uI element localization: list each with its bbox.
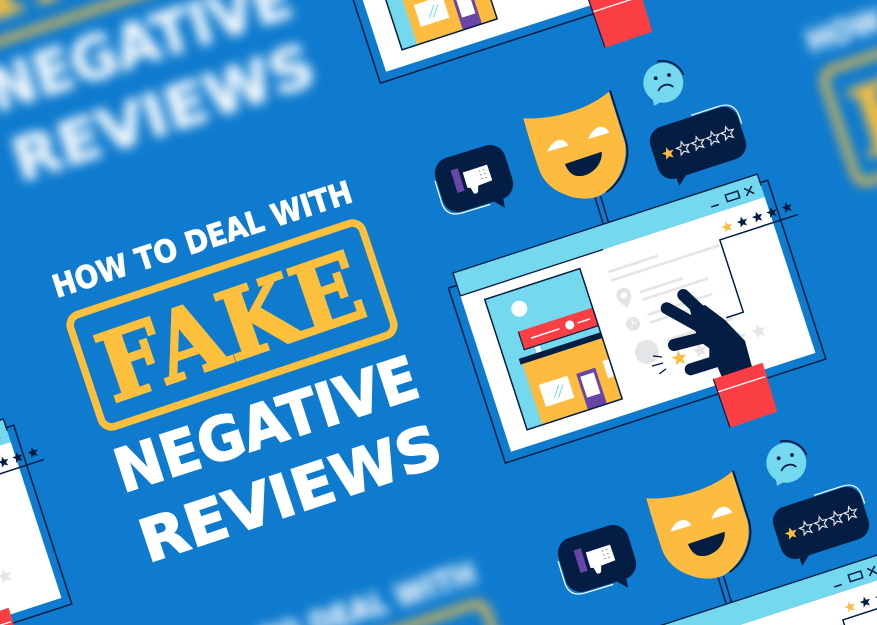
grey rating stars — [691, 322, 768, 358]
heading: reviews: REVIEWS — [131, 411, 450, 576]
shop building — [523, 338, 622, 425]
spark lines — [649, 353, 667, 375]
window back outline — [447, 180, 826, 463]
placeholder text lines — [608, 237, 742, 351]
heading: how to deal with: HOW TO DEAL WITH — [48, 175, 357, 306]
awning — [519, 332, 602, 365]
panel: storefront photo — [485, 269, 622, 430]
rating stars on title edge — [720, 200, 794, 233]
sun — [509, 299, 529, 319]
avatar placeholder — [632, 337, 662, 367]
panel: browser window — [444, 166, 843, 463]
main title — [48, 175, 450, 576]
stamp frame — [67, 220, 397, 430]
icon: map pin — [614, 286, 635, 310]
illustration: repeated scene top — [304, 0, 718, 83]
inner review box outline — [703, 215, 821, 318]
window white page — [460, 197, 815, 452]
illustration: repeated scene left — [0, 306, 89, 625]
window buttons — [709, 186, 754, 207]
icon: red sleeve — [713, 363, 777, 428]
illustration: main scene — [429, 61, 843, 463]
icon: mask stick — [595, 196, 609, 225]
icon: one star rating bubble — [645, 101, 752, 186]
side window — [603, 359, 615, 378]
blurred title: top right — [802, 0, 877, 185]
illustration: repeated scene bottom right — [552, 441, 877, 625]
blurred title: top left: REVIEWS — [4, 30, 323, 195]
shop sign — [518, 308, 601, 357]
icon: hand picking star — [667, 295, 752, 377]
icon: clock — [624, 315, 642, 333]
icon: sad face bubble — [643, 61, 684, 106]
heading: fake: FAKE — [84, 231, 378, 425]
icon: comedy mask — [523, 91, 627, 199]
window title bar — [453, 174, 765, 296]
heading: negative: NEGATIVE — [106, 343, 427, 507]
icon: thumbs down bubble — [429, 141, 518, 218]
shop window — [539, 376, 574, 407]
shop door — [576, 368, 607, 410]
